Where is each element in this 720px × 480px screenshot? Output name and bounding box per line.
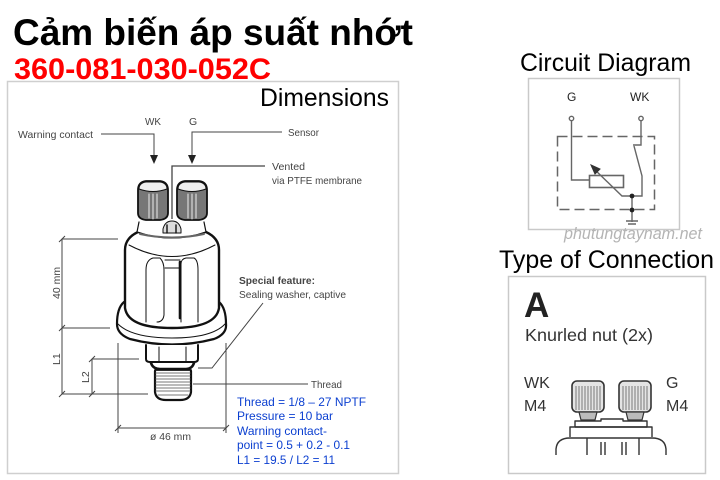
knurled nut right [177, 181, 207, 220]
connector drawing [556, 381, 666, 455]
panel: circuit diagram [528, 78, 680, 230]
terminal labels: WK [630, 90, 649, 104]
housing [556, 419, 666, 455]
terminal labels [567, 90, 649, 104]
callout labels: WK [145, 116, 161, 128]
terminal labels: G [666, 375, 678, 392]
callout labels: ø 46 mm [150, 431, 191, 443]
callout labels: Sensor [288, 127, 319, 139]
arrowheads [150, 155, 196, 164]
sensor drawing [117, 181, 226, 400]
callout labels: via PTFE membrane [272, 175, 362, 187]
terminal labels: G [567, 90, 576, 104]
connection type letter: A [524, 286, 549, 325]
terminal labels: M4 [666, 398, 688, 415]
watermark: phutungtaynam.net [563, 224, 703, 243]
flange [117, 302, 226, 344]
part number: 360-081-030-052C [14, 53, 271, 86]
callout labels: G [189, 116, 197, 128]
terminal labels [524, 375, 688, 415]
callout labels: Special feature: [239, 275, 315, 287]
body [125, 232, 219, 328]
callout labels: Warning contact [18, 129, 93, 141]
circuit schematic [558, 116, 654, 224]
callout labels [18, 116, 362, 443]
connection description: Knurled nut (2x) [525, 325, 653, 345]
specifications: point = 0.5 + 0.2 - 0.1 [237, 438, 350, 452]
title: Cảm biến áp suất nhớt [13, 12, 413, 53]
right nut [619, 381, 651, 420]
arrows and leader lines [59, 132, 308, 433]
callout labels: Vented [272, 161, 305, 173]
callout labels: L2 [80, 371, 92, 383]
specifications: Thread = 1/8 – 27 NPTF [237, 395, 366, 409]
callout labels: Thread [311, 379, 342, 391]
specifications: Pressure = 10 bar [237, 409, 333, 423]
terminal labels: WK [524, 375, 550, 392]
specifications: Warning contact- [237, 424, 327, 438]
terminal labels: M4 [524, 398, 546, 415]
thread [155, 370, 191, 400]
callout labels: L1 [51, 353, 63, 365]
knurled nut left [138, 181, 168, 220]
hexagon and washer [146, 345, 198, 369]
heading: type of connection: Type of Connection [499, 246, 714, 274]
specifications: L1 = 19.5 / L2 = 11 [237, 453, 335, 467]
panel: type of connection [508, 276, 706, 474]
specifications [237, 395, 366, 467]
terminal base [137, 221, 206, 238]
heading: dimensions: Dimensions [260, 84, 389, 112]
callout labels: Sealing washer, captive [239, 289, 346, 301]
callout labels: 40 mm [51, 267, 63, 299]
panel: dimensions [8, 82, 398, 474]
heading: circuit diagram: Circuit Diagram [520, 49, 691, 77]
left nut [572, 381, 604, 420]
